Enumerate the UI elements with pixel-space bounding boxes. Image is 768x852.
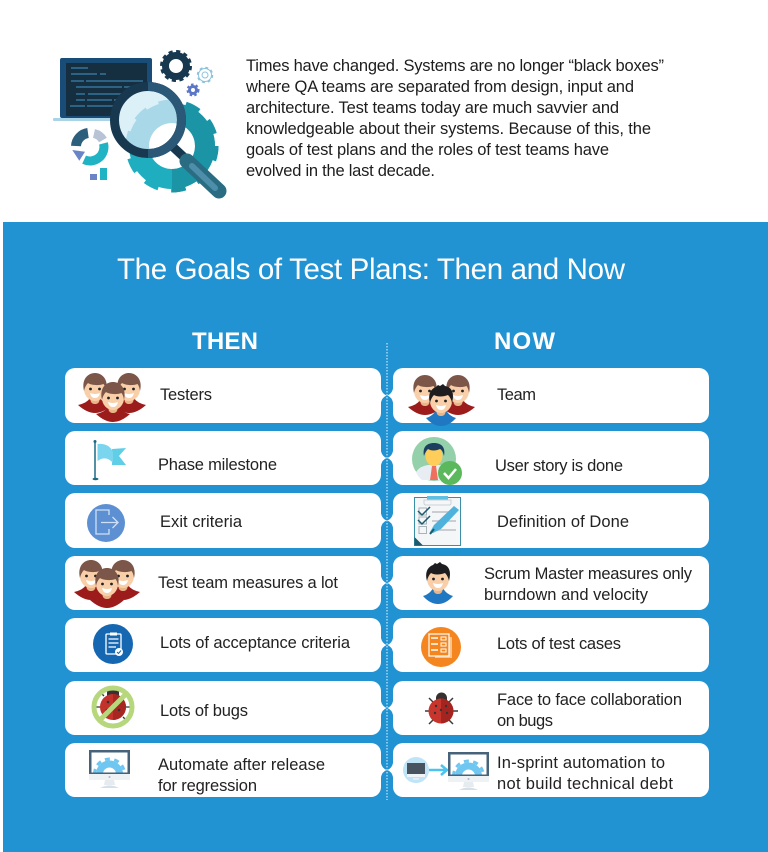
intro text	[245, 57, 664, 180]
card: lots of bugs	[65, 681, 386, 735]
label	[497, 754, 673, 793]
card: definition of done	[388, 493, 709, 548]
label: Test team measures a lot	[158, 574, 338, 592]
intro text: architecture. Test teams today are much savvier and	[246, 99, 619, 117]
illustration: laptop, gears and magnifying glass	[53, 52, 219, 191]
intro text: knowledgeable about their systems. Because of this, the	[246, 120, 651, 138]
magnifying glass	[114, 86, 219, 191]
icon: scrum master	[423, 562, 453, 604]
label: User story is done	[495, 457, 623, 475]
icon: automation	[403, 752, 489, 791]
label: Team	[497, 386, 536, 404]
label	[484, 565, 693, 604]
icon: no bugs	[94, 686, 132, 726]
column: then	[65, 368, 386, 797]
centre dashed divider	[386, 343, 388, 800]
label: Scrum Master measures only	[484, 565, 693, 583]
card: testers	[65, 368, 386, 423]
small bar chart	[90, 168, 107, 180]
icon: exit	[87, 504, 125, 542]
icon: ladybug	[425, 692, 458, 724]
card: acceptance criteria	[65, 618, 386, 672]
card: user story	[388, 431, 709, 485]
card: in-sprint automation	[388, 743, 709, 797]
label: In-sprint automation to	[497, 754, 665, 772]
card: face to face	[388, 681, 709, 735]
dark gear	[162, 52, 190, 80]
icon: three testers	[78, 373, 146, 422]
label: burndown and velocity	[484, 586, 649, 604]
icon: clipboard and pen	[414, 496, 460, 546]
label: Lots of acceptance criteria	[160, 634, 351, 652]
label: Testers	[160, 386, 212, 404]
heading: now: NOW	[494, 328, 555, 355]
card: phase milestone	[65, 431, 386, 485]
label: Lots of test cases	[497, 635, 621, 653]
icon: team	[408, 375, 475, 426]
icon: flag	[92, 440, 126, 480]
label: on bugs	[497, 712, 553, 730]
donut chart	[72, 133, 104, 161]
card: test team measures	[65, 556, 386, 610]
card: automate after release	[65, 743, 386, 797]
small blue gear	[188, 84, 198, 96]
label	[497, 691, 682, 730]
intro text: evolved in the last decade.	[246, 162, 435, 180]
title: The Goals of Test Plans: Then and Now	[117, 253, 626, 286]
label: Definition of Done	[497, 513, 629, 531]
laptop	[53, 58, 152, 121]
label	[158, 756, 325, 795]
icon: monitor with gear	[89, 750, 130, 789]
icon: clipboard checklist	[93, 624, 133, 664]
card: scrum master	[388, 556, 709, 610]
icon: test case sheets	[421, 627, 461, 667]
label: Face to face collaboration	[497, 691, 682, 709]
large teal gear	[130, 104, 214, 188]
heading: then: THEN	[192, 328, 258, 355]
card: test cases	[388, 618, 709, 672]
panel: goals of test plans	[3, 222, 768, 852]
label: Exit criteria	[160, 513, 243, 531]
card: exit criteria	[65, 493, 386, 548]
intro text: Times have changed. Systems are no longer “black boxes”	[246, 57, 664, 75]
intro text: where QA teams are separated from design, input and	[245, 78, 634, 96]
column: now	[388, 368, 709, 797]
label: Automate after release	[158, 756, 325, 774]
label: Phase milestone	[158, 456, 277, 474]
label: not build technical debt	[497, 775, 673, 793]
icon: test team	[74, 560, 140, 608]
label: for regression	[158, 777, 257, 795]
label: Lots of bugs	[160, 702, 248, 720]
icon: user with check	[412, 437, 462, 485]
intro text: goals of test plans and the roles of test teams have	[246, 141, 609, 159]
card: team	[388, 368, 709, 426]
outline gear	[198, 68, 212, 82]
